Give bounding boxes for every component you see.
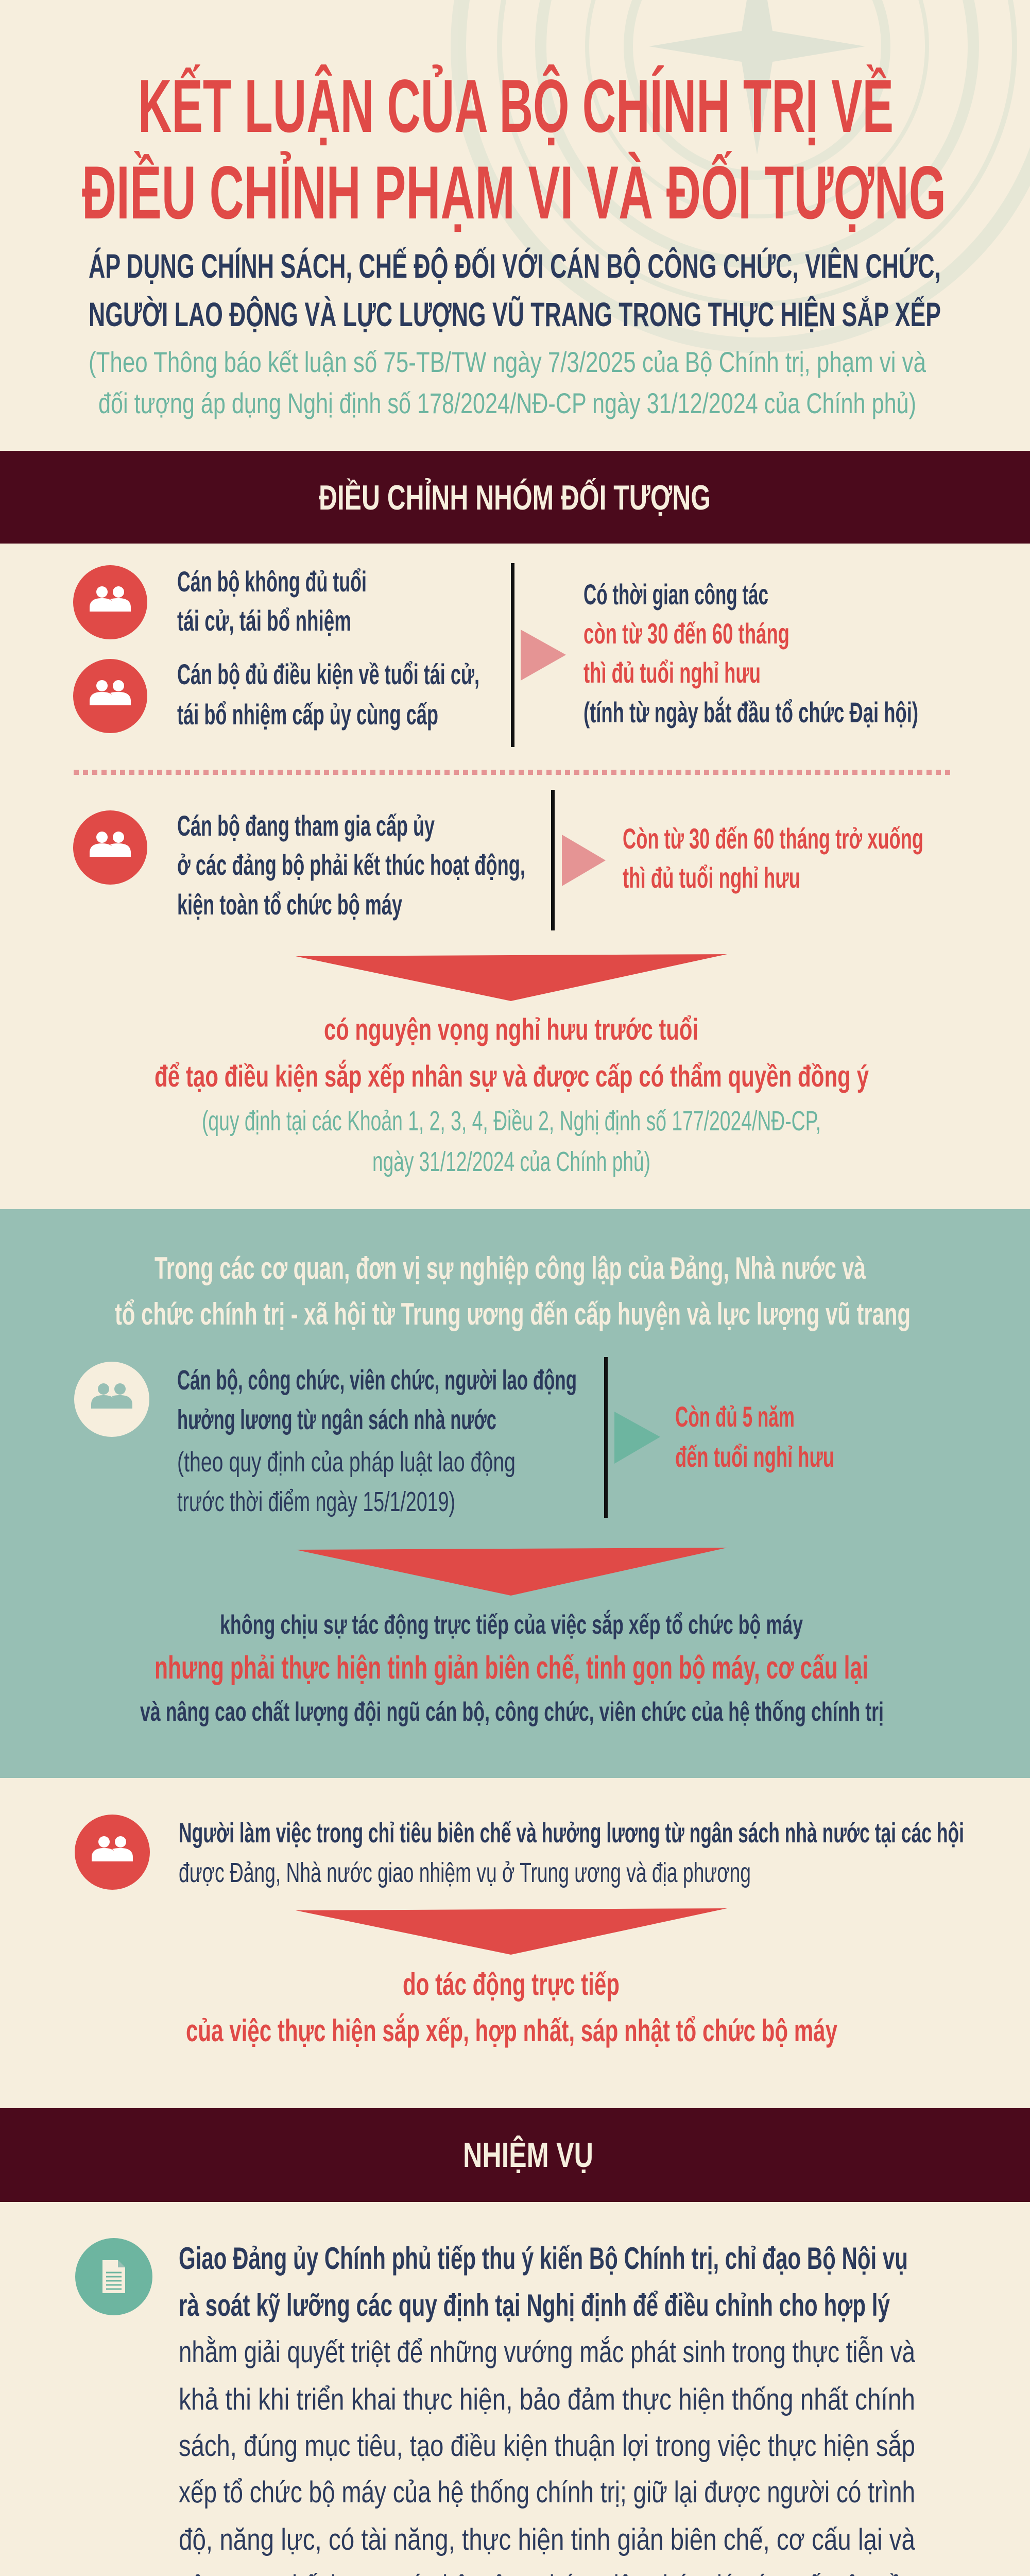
conclusion 1: có nguyện vọng nghỉ hưu trước tuổi [324,1013,698,1046]
group 1: two cadres: thì đủ tuổi nghỉ hưu [583,656,761,689]
panel: teal public units: (theo quy định của pháp luật lao động [177,1447,516,1478]
icon: document 1 [75,2238,152,2315]
group 2: party committee: thì đủ tuổi nghỉ hưu [623,861,800,894]
arrow: big down 2 [296,1548,727,1596]
group 1: two cadres: Có thời gian công tác [583,578,768,611]
arrow: big down 3 [296,1908,727,1955]
group 1: two cadres: còn từ 30 đến 60 tháng [583,617,789,650]
panel: teal public units: Cán bộ, công chức, viên chức, người lao động [177,1365,577,1396]
subtitle [89,247,941,333]
group 1: two cadres: Cán bộ đủ điều kiện về tuổi tái cử, [177,658,479,690]
panel: teal public units: hưởng lương từ ngân sách nhà nước [177,1404,496,1435]
arrow: pink 2 [562,835,606,886]
panel: teal public units: đến tuổi nghỉ hưu [675,1440,834,1473]
group 3: associations: được Đảng, Nhà nước giao nhiệm vụ ở Trung ương và địa phương [179,1857,751,1888]
panel: teal public units: Còn đủ 5 năm [675,1400,795,1433]
section band: dieu chinh nhom doi tuong: ĐIỀU CHỈNH NHÓM ĐỐI TƯỢNG [319,478,711,517]
group 1: two cadres: tái cử, tái bổ nhiệm [177,604,351,637]
group 1: two cadres [73,563,918,747]
group 2: party committee [73,790,923,930]
task 1 [75,2238,916,2576]
arrow: teal [614,1412,660,1464]
icon: people 4 [75,1815,150,1890]
arrow: pink [521,630,566,681]
title [82,64,946,234]
source note [89,346,926,419]
section band: nhiem vu [0,2108,1030,2202]
arrow: big down 1 [296,954,727,1001]
group 3: associations [75,1815,964,2048]
group 2: party committee: Cán bộ đang tham gia cấp ủy [177,809,435,842]
conclusion 1 [154,1013,869,1177]
panel: teal public units: trước thời điểm ngày 15/1/2019) [177,1486,455,1517]
icon: people 3 [73,810,147,885]
conclusion 1: ngày 31/12/2024 của Chính phủ) [372,1146,650,1177]
section band: nhiem vu: NHIỆM VỤ [463,2135,593,2175]
group 2: party committee: ở các đảng bộ phải kết thúc hoạt động, [177,849,525,881]
group 3: associations: do tác động trực tiếp [403,1967,620,2002]
group 1: two cadres: tái bổ nhiệm cấp ủy cùng cấp [177,698,438,731]
panel: teal public units [0,1209,1030,1778]
group 1: two cadres: Cán bộ không đủ tuổi [177,565,367,598]
icon: people 2 [73,659,147,733]
icon: people 1 [73,565,147,639]
icon: people cream [74,1362,149,1437]
decorative drum background [458,0,1030,345]
section band: dieu chinh nhom doi tuong [0,451,1030,544]
group 2: party committee: kiện toàn tổ chức bộ máy [177,888,402,921]
